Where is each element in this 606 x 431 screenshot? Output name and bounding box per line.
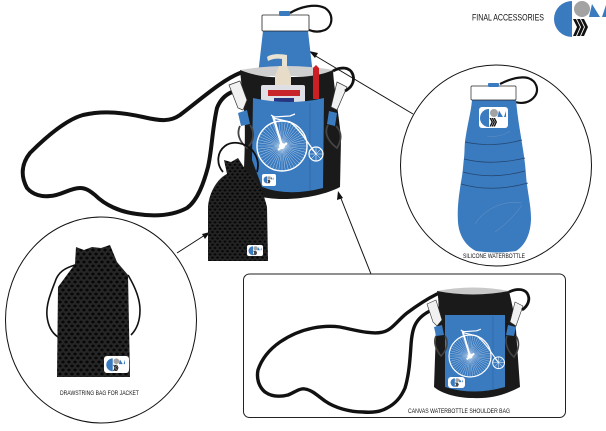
bottle cap bbox=[471, 86, 516, 100]
left clip bbox=[427, 300, 447, 356]
main product: bottle, bag and accessories bbox=[23, 6, 354, 215]
bottle folds bbox=[461, 140, 528, 188]
cap loop bbox=[500, 77, 537, 103]
arrow: to canvas bag bbox=[337, 191, 371, 274]
drawstring cords bbox=[47, 265, 140, 337]
mesh bag body bbox=[57, 245, 130, 377]
pocket bbox=[445, 315, 505, 392]
silicone bottle body bbox=[458, 100, 531, 252]
caption: CANVAS WATERBOTTLE SHOULDER BAG bbox=[408, 408, 510, 415]
right strap loop bbox=[333, 68, 354, 91]
caption: SILICONE WATERBOTTLE bbox=[463, 253, 526, 260]
icon: brand logo bbox=[554, 1, 606, 37]
small logo patch bbox=[262, 174, 276, 186]
circle outline bbox=[400, 65, 592, 266]
logo patch bbox=[479, 107, 508, 128]
logo patch bbox=[448, 377, 465, 388]
bottle body bbox=[258, 31, 313, 75]
bag body bbox=[434, 291, 520, 398]
red pen bbox=[313, 65, 319, 99]
caption: DRAWSTRING BAG FOR JACKET bbox=[60, 390, 139, 397]
logo patch bbox=[247, 245, 263, 256]
small drawstring bag bbox=[208, 143, 268, 261]
cap tab bbox=[488, 83, 499, 87]
sanitizer bottle bbox=[261, 54, 305, 104]
panel frame bbox=[244, 274, 566, 418]
panel: canvas waterbottle shoulder bag bbox=[244, 274, 566, 418]
panel: drawstring bag for jacket bbox=[6, 217, 196, 423]
shoulder strap bbox=[23, 73, 240, 215]
arrow: to drawstring bag bbox=[177, 232, 210, 253]
penny-farthing print bbox=[257, 114, 323, 171]
heading: final accessories: FINAL ACCESSORIES bbox=[472, 12, 544, 22]
arrow: to silicone bottle bbox=[309, 51, 413, 114]
bottle cap loop bbox=[290, 6, 331, 31]
left clip bbox=[229, 81, 253, 148]
bag mesh body bbox=[208, 158, 268, 261]
penny-farthing print bbox=[449, 329, 504, 377]
bag body bbox=[240, 70, 341, 199]
right clip bbox=[506, 302, 523, 357]
front pocket bbox=[252, 98, 324, 192]
cord loop bbox=[218, 143, 258, 172]
bag back rim bbox=[240, 66, 333, 76]
right clip bbox=[326, 82, 347, 148]
right strap loop bbox=[509, 290, 529, 310]
shoulder strap bbox=[257, 294, 437, 412]
cap tab bbox=[279, 11, 290, 16]
logo patch bbox=[104, 356, 129, 373]
bag rim bbox=[437, 288, 509, 296]
bottle cap bbox=[262, 15, 309, 31]
panel: silicone waterbottle bbox=[400, 65, 592, 266]
circle outline bbox=[6, 217, 196, 423]
